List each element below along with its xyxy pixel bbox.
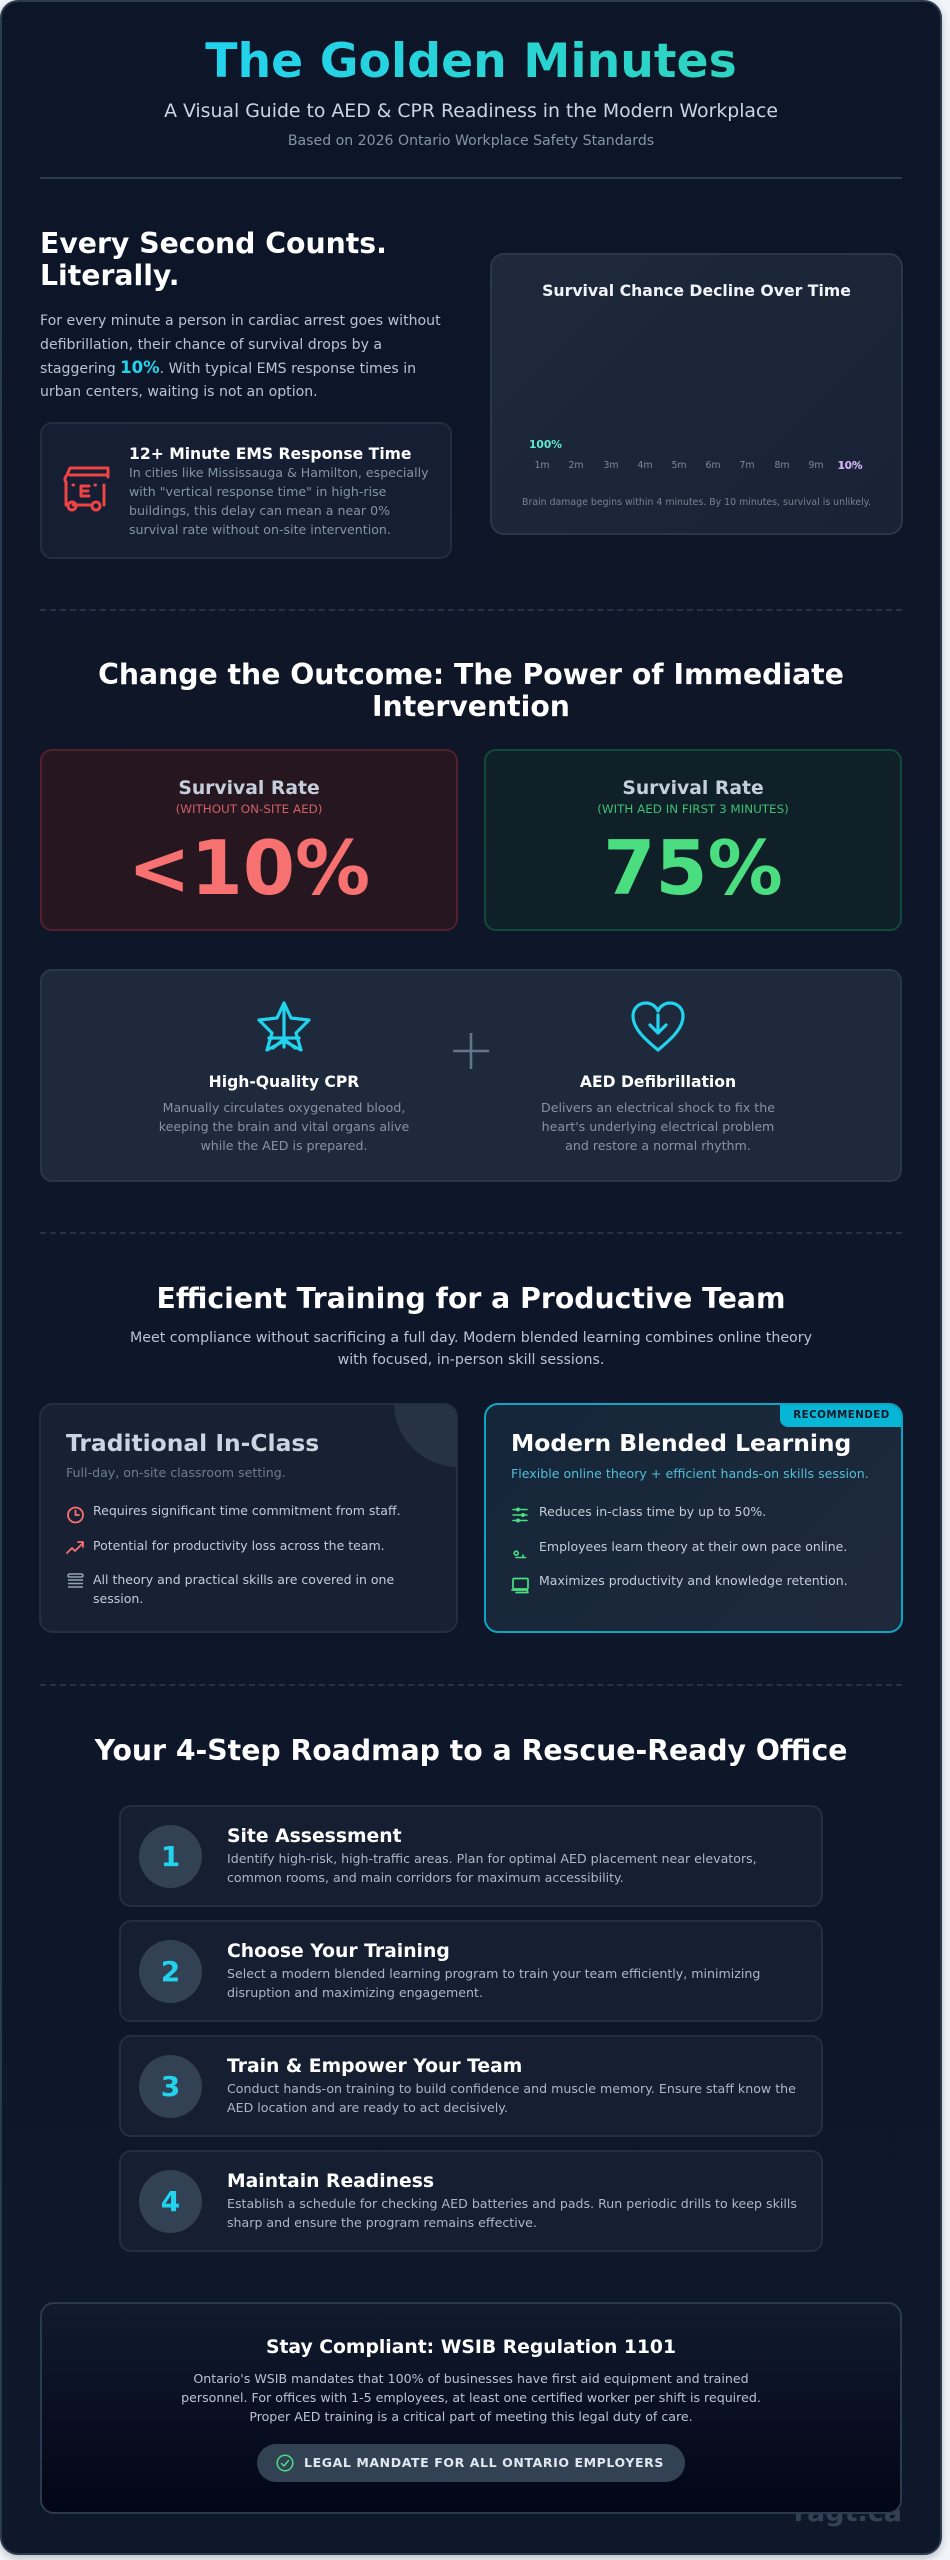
step number — [139, 1825, 202, 1888]
step 3 — [119, 2035, 823, 2137]
AED description — [541, 1100, 775, 1153]
panel: modern blended learning — [484, 1403, 903, 1633]
traditional title: Traditional In-Class — [66, 1429, 319, 1457]
compliance title: Stay Compliant: WSIB Regulation 1101 — [266, 2337, 676, 2358]
panel: without AED — [40, 749, 458, 931]
plus sign — [453, 1033, 489, 1069]
step title: Choose Your Training — [227, 1941, 450, 1962]
item: Potential for productivity loss across the team. — [93, 1538, 385, 1553]
ems description: In cities like Mississauga & Hamilton, especially — [129, 465, 429, 480]
step 2 — [119, 1920, 823, 2022]
step description — [227, 2081, 796, 2115]
chart axis labels: 10% — [837, 460, 863, 472]
chart axis labels: 1m — [534, 460, 550, 471]
step description: disruption and maximizing engagement. — [227, 1985, 483, 2000]
heading: change the outcome — [98, 658, 844, 723]
step description: common rooms, and main corridors for maximum accessibility. — [227, 1870, 624, 1885]
watermark: ragt.ca — [794, 2497, 902, 2528]
step 1 — [119, 1805, 823, 1907]
step title: Maintain Readiness — [227, 2171, 434, 2192]
item: Requires significant time commitment from staff. — [93, 1503, 401, 1518]
modern subtitle: Flexible online theory + efficient hands-on skills session. — [511, 1466, 869, 1481]
step description: Establish a schedule for checking AED batteries and pads. Run periodic drills to keep skills — [227, 2196, 797, 2211]
heading: change the outcome: Intervention — [372, 690, 570, 723]
intro paragraph: For every minute a person in cardiac arrest goes without — [40, 313, 441, 329]
subtitle: A Visual Guide to AED & CPR Readiness in the Modern Workplace — [164, 101, 778, 122]
heading: efficient training: Efficient Training for a Productive Team — [157, 1282, 785, 1315]
panel: with AED — [484, 749, 902, 931]
badge: RECOMMENDED — [793, 1409, 890, 1421]
heading: every second counts: Every Second Counts. — [40, 227, 387, 260]
compliance text: Ontario's WSIB mandates that 100% of businesses have first aid equipment and trained — [193, 2371, 749, 2386]
CPR description — [159, 1100, 409, 1153]
compliance text: Proper AED training is a critical part of meeting this legal duty of care. — [249, 2409, 693, 2424]
icon: heart — [631, 1001, 685, 1052]
label: Survival Rate — [178, 778, 320, 799]
item: All theory and practical skills are covered in one — [93, 1572, 394, 1587]
modern title: Modern Blended Learning — [511, 1429, 851, 1457]
ems description: survival rate without on-site intervention. — [129, 522, 391, 537]
step number — [139, 2055, 202, 2118]
ems description: buildings, this delay can mean a near 0% — [129, 503, 390, 518]
value: 75% — [603, 824, 783, 912]
step title: Train & Empower Your Team — [227, 2056, 522, 2077]
chart footnote: Brain damage begins within 4 minutes. By 10 minutes, survival is unlikely. — [522, 497, 871, 508]
pill text: LEGAL MANDATE FOR ALL ONTARIO EMPLOYERS — [304, 2455, 664, 2470]
ems title: 12+ Minute EMS Response Time — [129, 445, 412, 463]
chart axis labels: 3m — [603, 460, 619, 471]
chart axis labels — [534, 460, 863, 472]
heading: every second counts: Literally. — [40, 259, 180, 292]
panel: survival chart — [490, 253, 903, 535]
step number: 4 — [161, 2185, 180, 2218]
training intro: Meet compliance without sacrificing a full day. Modern blended learning combines online theory — [130, 1330, 812, 1346]
icon: laptop — [511, 1578, 529, 1594]
step description: Select a modern blended learning program to train your team efficiently, minimizing — [227, 1966, 760, 1981]
step description: AED location and are ready to act decisively. — [227, 2100, 508, 2115]
chart axis labels: 8m — [774, 460, 790, 471]
AED description: heart's underlying electrical problem — [542, 1119, 774, 1134]
step description: sharp and ensure the program remains effective. — [227, 2215, 537, 2230]
item — [93, 1572, 394, 1606]
heading: every second counts — [40, 227, 387, 292]
icon: trend — [66, 1541, 84, 1554]
label: Survival Rate — [622, 778, 764, 799]
step 4 — [119, 2150, 823, 2252]
intro paragraph — [40, 313, 441, 400]
title: The Golden Minutes — [205, 34, 737, 89]
icon: sliders — [512, 1508, 528, 1522]
ems description: with "vertical response time" in high-rise — [129, 484, 386, 499]
value: <10% — [128, 824, 370, 912]
AED description: Delivers an electrical shock to fix the — [541, 1100, 775, 1115]
step description — [227, 1851, 757, 1885]
chart axis labels: 4m — [637, 460, 653, 471]
decorative circle — [394, 1339, 522, 1467]
step number — [139, 2170, 202, 2233]
mandate pill — [257, 2444, 685, 2482]
chart title: Survival Chance Decline Over Time — [542, 281, 851, 300]
item: Reduces in-class time by up to 50%. — [539, 1504, 766, 1519]
heading: change the outcome: Change the Outcome: The Power of Immediate — [98, 658, 844, 691]
badge — [780, 1403, 903, 1427]
chart axis labels: 5m — [671, 460, 687, 471]
panel: EMS response time — [40, 422, 452, 559]
step number: 1 — [161, 1840, 180, 1873]
chart axis labels: 7m — [739, 460, 755, 471]
step title: Site Assessment — [227, 1826, 402, 1847]
compliance text: personnel. For offices with 1-5 employees, at least one certified worker per shift is required. — [181, 2390, 761, 2405]
chart axis labels: 6m — [705, 460, 721, 471]
heading: roadmap: Your 4-Step Roadmap to a Rescue-Ready Office — [95, 1734, 847, 1767]
step description: Identify high-risk, high-traffic areas. Plan for optimal AED placement near elevators, — [227, 1851, 757, 1866]
intro paragraph: urban centers, waiting is not an option. — [40, 384, 318, 400]
CPR description: while the AED is prepared. — [200, 1138, 368, 1153]
CPR title: High-Quality CPR — [209, 1073, 359, 1091]
item: Maximizes productivity and knowledge retention. — [539, 1573, 848, 1588]
chart axis labels: 10m — [839, 460, 861, 471]
chart start value: 100% — [529, 438, 562, 451]
step description — [227, 1966, 760, 2000]
step description — [227, 2196, 797, 2230]
panel: traditional in-class — [39, 1403, 458, 1633]
icon: star — [257, 1001, 311, 1052]
intro paragraph: defibrillation, their chance of survival drops by a — [40, 337, 382, 353]
CPR description: keeping the brain and vital organs alive — [159, 1119, 409, 1134]
CPR description: Manually circulates oxygenated blood, — [163, 1100, 405, 1115]
step number — [139, 1940, 202, 2003]
chart axis labels: 9m — [808, 460, 824, 471]
icon: layers — [67, 1573, 84, 1588]
step number: 2 — [161, 1955, 180, 1988]
sublabel: (WITHOUT ON-SITE AED) — [176, 802, 322, 816]
step number: 3 — [161, 2070, 180, 2103]
chart axis labels: 2m — [568, 460, 584, 471]
item: session. — [93, 1591, 143, 1606]
source note: Based on 2026 Ontario Workplace Safety Standards — [288, 133, 654, 149]
training intro — [130, 1330, 812, 1368]
icon: check — [276, 2454, 294, 2472]
training intro: with focused, in-person skill sessions. — [338, 1352, 604, 1368]
ems description — [129, 465, 429, 537]
item: Employees learn theory at their own pace online. — [539, 1539, 847, 1554]
traditional subtitle: Full-day, on-site classroom setting. — [66, 1465, 286, 1480]
icon: ambulance — [63, 466, 110, 512]
intro paragraph: staggering 10%. With typical EMS response times in — [40, 358, 416, 377]
step description: Conduct hands-on training to build confidence and muscle memory. Ensure staff know the — [227, 2081, 796, 2096]
icon: clock — [67, 1506, 84, 1524]
icon: key — [513, 1550, 526, 1558]
panel: CPR plus AED — [40, 969, 902, 1182]
panel: compliance — [40, 2302, 902, 2514]
compliance text — [181, 2371, 761, 2424]
AED description: and restore a normal rhythm. — [565, 1138, 751, 1153]
AED title: AED Defibrillation — [580, 1073, 736, 1091]
sublabel: (WITH AED IN FIRST 3 MINUTES) — [597, 802, 789, 816]
